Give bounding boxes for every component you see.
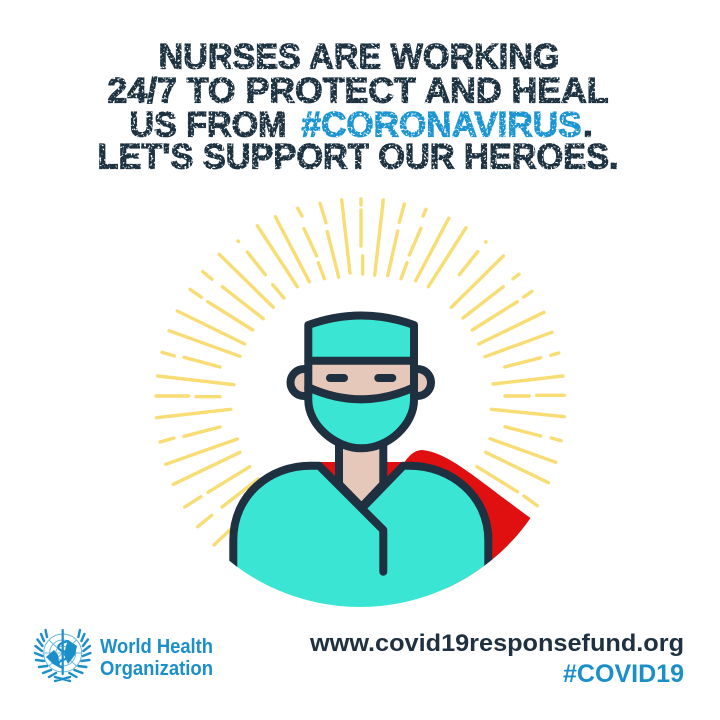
title xyxy=(98,36,618,176)
globe xyxy=(44,634,82,672)
laurel wreath xyxy=(35,630,90,681)
face xyxy=(312,364,410,396)
hashtag: #COVID19 xyxy=(563,660,684,688)
continents xyxy=(46,640,77,668)
scrubs body xyxy=(233,470,488,607)
title: NURSES ARE WORKING xyxy=(158,36,560,76)
WHO wordmark: Organization xyxy=(100,658,213,680)
website url: www.covid19responsefund.org xyxy=(309,630,684,657)
surgical mask xyxy=(308,387,414,448)
title: LET'S SUPPORT OUR HEROES. xyxy=(98,136,618,176)
red cape xyxy=(320,450,530,588)
WHO wordmark xyxy=(100,636,213,680)
staff and serpent xyxy=(58,630,69,674)
left ear xyxy=(290,369,308,396)
right ear xyxy=(414,369,431,396)
title: . xyxy=(583,104,593,144)
surgical cap xyxy=(308,316,414,361)
title: 24/7 TO PROTECT AND HEAL xyxy=(108,70,608,110)
nurse illustration xyxy=(233,316,536,620)
WHO emblem xyxy=(35,630,90,681)
eyes xyxy=(330,374,392,382)
title: #CORONAVIRUS xyxy=(302,104,582,144)
WHO wordmark: World Health xyxy=(100,636,213,658)
scrubs outline xyxy=(233,466,488,575)
sun rays xyxy=(156,199,564,545)
neck xyxy=(339,440,383,507)
title: US FROM xyxy=(130,104,286,144)
face side lines xyxy=(308,360,414,390)
